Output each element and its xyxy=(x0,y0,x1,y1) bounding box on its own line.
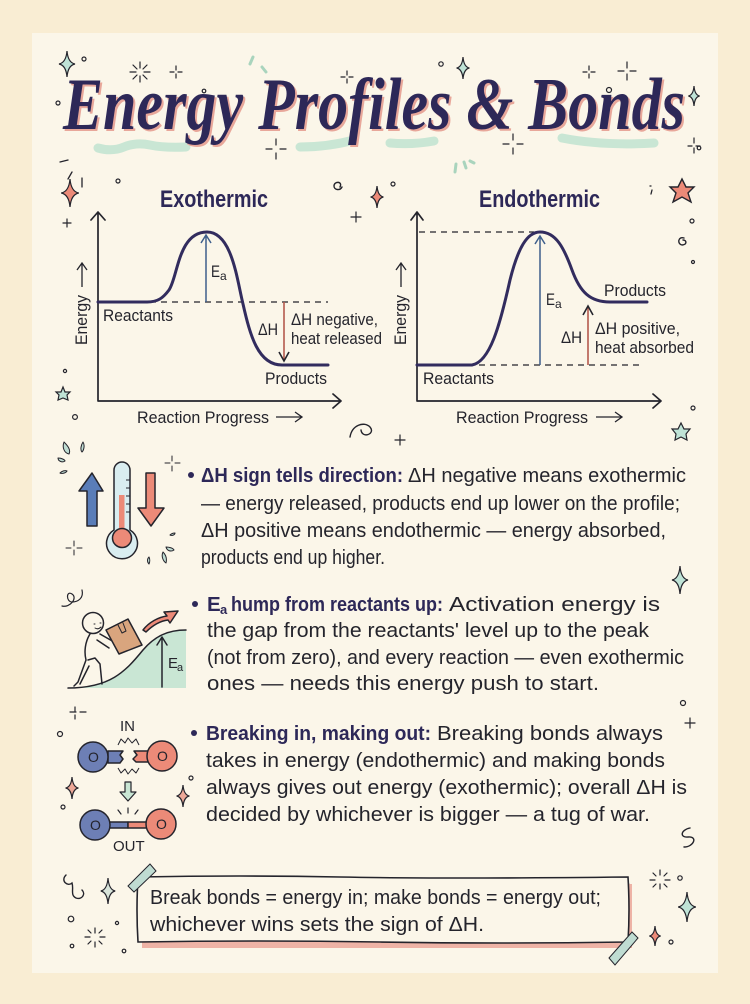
labels: E xyxy=(546,290,555,309)
Ea label xyxy=(168,655,184,674)
right atom O xyxy=(147,741,177,771)
icon: bond breaking and making: O xyxy=(156,816,167,832)
icon: bond breaking and making: O xyxy=(90,817,101,833)
callout text: Break bonds = energy in; make bonds = energy out; xyxy=(150,886,601,909)
down arrow xyxy=(120,782,136,801)
Ea arrow xyxy=(201,235,211,302)
callout box: whichever wins sets the sign of ΔH. xyxy=(149,913,484,936)
OUT label: OUT xyxy=(113,838,145,855)
labels: a xyxy=(220,269,227,283)
droplet marks xyxy=(58,442,175,564)
right tape xyxy=(609,932,638,965)
delta H arrow xyxy=(279,302,289,361)
axes xyxy=(91,212,341,408)
hill xyxy=(68,630,186,688)
shadow xyxy=(142,884,632,948)
body: ΔH negative means exothermic xyxy=(408,464,686,487)
delta H arrow xyxy=(583,306,593,365)
box xyxy=(106,619,142,654)
text block: bonds: decided by whichever is bigger — a tug of war. xyxy=(206,803,650,826)
axis direction arrows xyxy=(396,263,622,422)
text block: delta H sign: products end up higher. xyxy=(201,546,385,569)
title underline washes xyxy=(98,138,654,150)
axes xyxy=(411,212,661,408)
text block: activation energy: the gap from the reactants' level up to the peak xyxy=(207,619,650,642)
labels: a xyxy=(555,297,562,311)
Ea label: E xyxy=(168,655,178,672)
labels: Reaction Progress xyxy=(137,409,269,427)
icon: thermometer with arrows xyxy=(58,442,180,564)
labels: Reactants xyxy=(103,307,173,325)
text block: bonds: takes in energy (endothermic) and making bonds xyxy=(206,749,665,772)
text block: activation energy: (not from zero), and every reaction — even exothermic xyxy=(207,646,684,669)
bottom left atom O xyxy=(80,810,110,840)
text block: delta H sign xyxy=(188,464,686,569)
reactant level dashed line xyxy=(150,301,328,303)
labels: heat released xyxy=(291,330,382,348)
box xyxy=(137,876,629,943)
body: Breaking bonds always xyxy=(437,722,663,745)
heading: Endothermic: Endothermic xyxy=(479,186,600,213)
energy curve xyxy=(417,232,647,365)
body: Activation energy is xyxy=(449,593,660,616)
icon: bond breaking and making: O xyxy=(88,749,99,765)
left atom O xyxy=(78,742,108,772)
bullet xyxy=(192,601,198,607)
labels: Reaction Progress xyxy=(456,409,588,427)
broken bond bonds xyxy=(108,751,123,763)
joined bond xyxy=(108,822,128,828)
text block: bonds xyxy=(191,722,687,826)
labels: heat absorbed xyxy=(595,339,694,357)
red down arrow xyxy=(138,473,164,526)
title xyxy=(62,64,687,150)
labels xyxy=(392,282,694,427)
labels: ΔH negative, xyxy=(291,311,378,329)
Ea label: a xyxy=(177,662,184,674)
heading: Breaking in, making out: xyxy=(206,722,431,745)
labels: E xyxy=(211,262,220,281)
bullet xyxy=(191,730,197,736)
text block: delta H sign: — energy released, products end up lower on the profile; xyxy=(201,492,680,515)
labels: Products xyxy=(604,282,666,300)
labels xyxy=(73,262,382,427)
energy curve xyxy=(98,232,328,365)
labels: Energy xyxy=(392,294,410,345)
burst marks xyxy=(118,738,139,774)
icon: person pushing box up hill xyxy=(62,590,186,688)
icon: bond breaking and making xyxy=(78,718,177,855)
heading: ΔH sign tells direction: xyxy=(201,464,403,487)
labels: Energy xyxy=(73,294,91,345)
labels: ΔH xyxy=(258,321,278,339)
labels: Reactants xyxy=(423,370,494,388)
blue up arrow xyxy=(79,473,103,526)
heading: hump from reactants up: xyxy=(231,593,443,616)
labels: Products xyxy=(265,370,327,388)
Ea arrow xyxy=(157,637,167,687)
chart: endothermic xyxy=(392,186,694,427)
text block: activation energy: ones — needs this energy push to start. xyxy=(207,672,599,695)
labels: ΔH positive, xyxy=(595,320,680,338)
icon: bond breaking and making: O xyxy=(157,748,168,764)
chart: exothermic xyxy=(73,186,382,427)
bottom right atom O xyxy=(146,809,176,839)
heading: a xyxy=(220,602,228,617)
axis direction arrows xyxy=(77,263,302,422)
heading: E xyxy=(207,593,221,616)
IN label: IN xyxy=(120,718,135,735)
person xyxy=(82,612,104,634)
text block: delta H sign: ΔH positive means endothermic — energy absorbed, xyxy=(201,519,666,542)
thermometer xyxy=(106,462,137,559)
decorative sparkles and dots xyxy=(56,51,701,953)
bullet xyxy=(188,472,194,478)
heading: Exothermic: Exothermic xyxy=(160,186,268,213)
labels: ΔH xyxy=(561,329,582,347)
text block: bonds: always gives out energy (exothermic); overall ΔH is xyxy=(206,776,687,799)
left tape xyxy=(128,864,156,892)
Ea arrow xyxy=(535,236,545,365)
dashed levels xyxy=(419,232,643,365)
callout box xyxy=(128,864,638,965)
text block: activation energy xyxy=(192,593,684,695)
push arrow xyxy=(143,611,178,632)
